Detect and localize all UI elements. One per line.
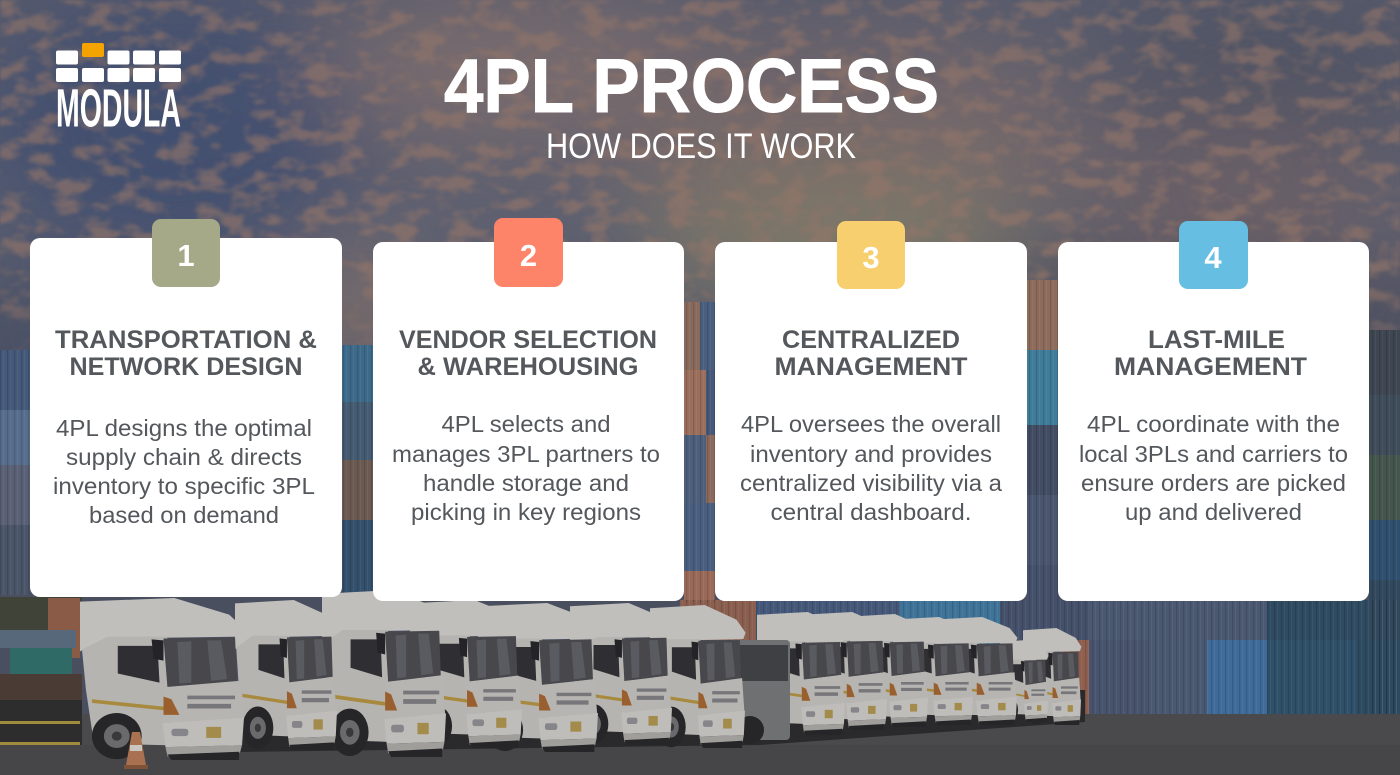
badge 4: [1179, 221, 1248, 289]
heading: vendor selection and warehousing: VENDOR SELECTION: [399, 326, 657, 354]
title: 4PL PROCESS: [444, 44, 939, 129]
body text step 4: local 3PLs and carriers to: [1079, 441, 1348, 467]
background photo: ground: [0, 690, 1400, 775]
badge 1: [152, 219, 220, 287]
body text step 1: supply chain & directs: [66, 444, 302, 470]
panel: step 3: [715, 221, 1027, 601]
body text step 1: 4PL designs the optimal: [56, 415, 312, 441]
badge 2: 2: [520, 238, 537, 273]
badge 2: [494, 218, 563, 287]
heading: last-mile management: LAST-MILE: [1148, 326, 1285, 354]
background photo: row of white trucks: [80, 590, 1081, 760]
body text step 2: manages 3PL partners to: [392, 441, 660, 467]
heading: last-mile management: [1114, 326, 1307, 381]
heading: centralized management: CENTRALIZED: [782, 326, 960, 354]
body text step 3: 4PL oversees the overall: [741, 411, 1001, 437]
body text step 3: central dashboard.: [770, 499, 972, 525]
background photo: sky: [0, 0, 1400, 350]
logo wordmark: MODULA: [56, 78, 181, 138]
body text step 2: [392, 411, 660, 525]
card 1 background: [30, 238, 342, 597]
card 3 background: [715, 242, 1027, 601]
panel: step 4: [1058, 221, 1369, 601]
body text step 2: picking in key regions: [411, 499, 641, 525]
body text step 4: up and delivered: [1125, 499, 1302, 525]
heading: last-mile management: MANAGEMENT: [1114, 353, 1307, 381]
heading: centralized management: [774, 326, 968, 381]
panel: step 2: [373, 218, 684, 601]
heading: transportation and network design: NETWORK DESIGN: [70, 353, 302, 381]
background photo: yard at left: [0, 597, 82, 745]
logo: Modula: [56, 43, 181, 138]
icon: traffic cone: [124, 732, 148, 769]
heading: transportation and network design: TRANSPORTATION &: [55, 326, 317, 354]
body text step 3: [740, 411, 1002, 525]
subtitle: HOW DOES IT WORK: [546, 127, 856, 166]
heading: vendor selection and warehousing: & WAREHOUSING: [418, 353, 638, 381]
card 2 background: [373, 242, 684, 601]
body text step 3: centralized visibility via a: [740, 470, 1002, 496]
body text step 2: 4PL selects and: [442, 411, 610, 437]
panel: step 1: [30, 219, 342, 597]
logo mark: blocks: [56, 43, 181, 82]
body text step 1: [53, 415, 315, 528]
body text step 4: 4PL coordinate with the: [1087, 411, 1340, 437]
badge 3: 3: [862, 240, 880, 275]
body text step 1: inventory to specific 3PL: [53, 473, 315, 499]
body text step 4: [1079, 411, 1348, 525]
body text step 3: inventory and provides: [750, 441, 992, 467]
badge 1: 1: [177, 238, 195, 273]
body text step 4: ensure orders are picked: [1081, 470, 1346, 496]
body text step 2: handle storage and: [423, 470, 629, 496]
heading: centralized management: MANAGEMENT: [774, 353, 968, 381]
body text step 1: based on demand: [89, 502, 279, 528]
heading: transportation and network design: [55, 326, 317, 381]
badge 4: 4: [1204, 240, 1222, 275]
badge 3: [837, 221, 905, 289]
heading: vendor selection and warehousing: [399, 326, 657, 381]
background photo: container stacks: [0, 280, 1400, 715]
card 4 background: [1058, 242, 1369, 601]
